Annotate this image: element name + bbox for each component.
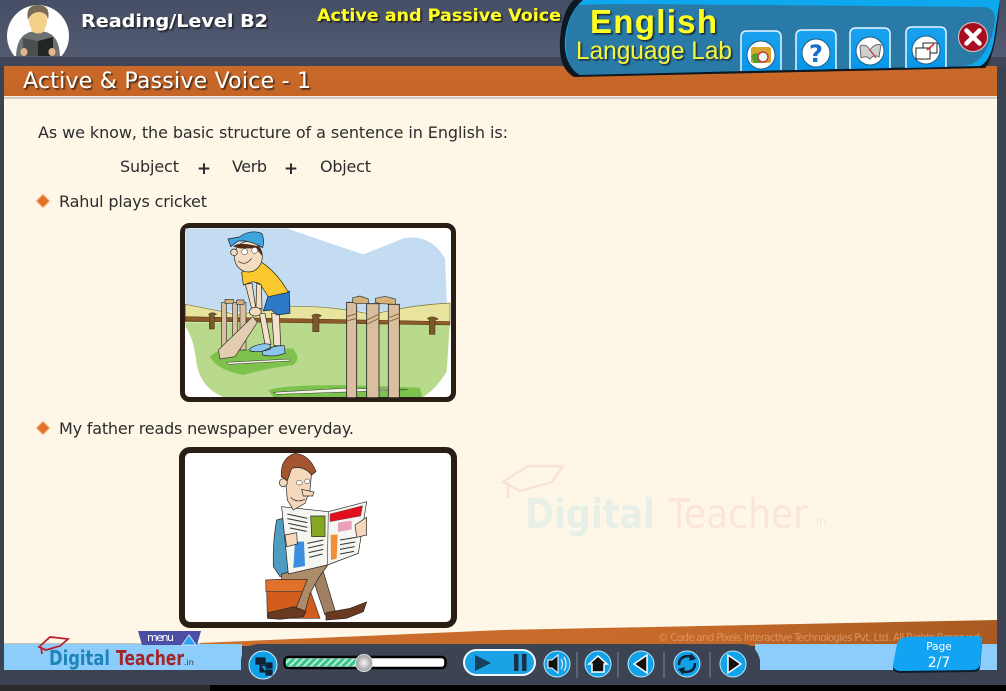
watermark: Digital Teacher: Teacher (667, 490, 808, 538)
logo: Digital Teacher: .in (184, 658, 194, 667)
header: level label: Reading/Level B2 (81, 11, 268, 32)
arms (245, 283, 262, 310)
icon: close button (958, 22, 988, 52)
page counter badge: 2/7 (928, 655, 950, 671)
control bar (241, 644, 760, 685)
sentence structure formula: Object (320, 157, 371, 176)
footer: blue bands (4, 644, 997, 670)
icon: glossary book tab (850, 28, 890, 69)
sky (185, 228, 447, 312)
watermark: Digital Teacher: Digital (525, 490, 655, 538)
control separators (577, 652, 710, 678)
head (285, 462, 312, 510)
icon: help tab (796, 30, 836, 70)
brand panel: English Language Lab: Language Lab (576, 37, 732, 65)
shirt (242, 262, 288, 297)
icon: next page (720, 651, 746, 677)
brand panel: English Language Lab (560, 0, 1000, 77)
bullet: My father reads newspaper everyday: My father reads newspaper everyday. (59, 419, 354, 438)
sentence structure formula: Verb (232, 157, 267, 176)
batsman legs and shoes (259, 313, 281, 346)
page counter badge: Page (926, 641, 952, 653)
box seat (267, 590, 320, 618)
header: avatar of reader (7, 5, 69, 56)
menu tab (138, 631, 201, 645)
intro text: As we know, the basic structure of a sentence in English is: (38, 123, 508, 142)
hills (185, 303, 450, 322)
footer: copyright: © Code and Pixels Interactive Technologies Pvt. Ltd. All Rights Reserved (658, 632, 980, 644)
icon: tree menu button (249, 651, 277, 679)
page counter badge (893, 636, 982, 673)
near stumps (347, 302, 399, 398)
newspaper (282, 502, 367, 574)
trousers (313, 572, 336, 615)
shoes (268, 602, 367, 620)
grass (185, 322, 450, 397)
logo: Digital Teacher: Teacher (116, 646, 184, 670)
icon: refresh (674, 651, 700, 677)
far stumps (222, 302, 246, 350)
sentence structure formula: + (284, 159, 298, 179)
menu tab: menu (147, 631, 174, 644)
sentence structure formula (120, 157, 371, 179)
header: topic title: Active and Passive Voice (317, 6, 561, 26)
icon: resources tab (741, 31, 781, 71)
fence (185, 317, 450, 325)
illustration: man reading newspaper (182, 450, 454, 625)
logo: Digital Teacher (39, 637, 194, 670)
brand panel: English Language Lab: English (590, 3, 717, 40)
sentence structure formula: Subject (120, 157, 179, 176)
watermark: Digital Teacher: .in (812, 515, 827, 529)
pitch patches (210, 348, 297, 375)
title bar: Active & Passive Voice - 1 (23, 69, 311, 94)
hands (285, 517, 367, 547)
head (234, 241, 262, 272)
sentence structure formula: + (197, 159, 211, 179)
icon: home (585, 651, 611, 677)
footer: bottom strip (0, 685, 1006, 691)
play and pause control (464, 650, 535, 675)
watermark: Digital Teacher (503, 466, 827, 538)
icon: help tab: ? (809, 40, 823, 68)
shorts (263, 291, 290, 315)
bullet: Rahul plays cricket: Rahul plays cricket (59, 192, 207, 211)
jacket (273, 517, 297, 577)
content panel (4, 96, 997, 646)
illustration: batsman at cricket wickets (182, 226, 454, 400)
icon: sound (544, 651, 570, 677)
title bar (4, 66, 997, 98)
progress slider (284, 654, 446, 672)
bat (218, 317, 257, 359)
icon: previous page (628, 651, 654, 677)
logo: Digital Teacher: Digital (49, 646, 110, 670)
footer: orange wedge (200, 620, 997, 646)
cap (228, 232, 264, 248)
icon: window tab (906, 27, 946, 68)
